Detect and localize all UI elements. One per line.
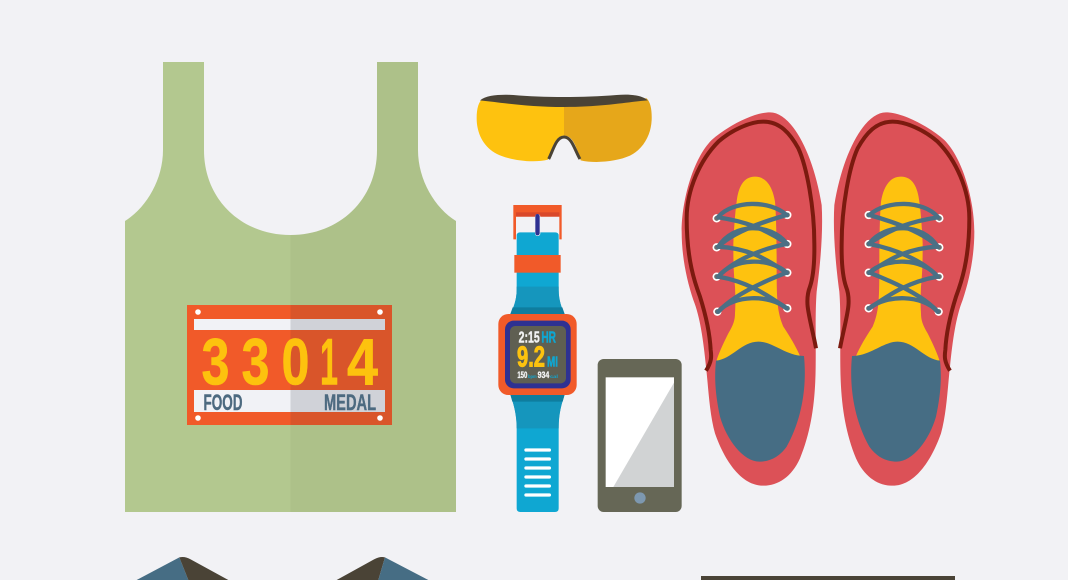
watch readouts: HR <box>541 329 556 346</box>
strap loop <box>514 255 561 273</box>
tank top body <box>125 62 456 512</box>
bib labels: FOOD <box>204 390 242 415</box>
right lens <box>564 98 652 162</box>
screen <box>606 377 674 487</box>
top band <box>480 95 648 107</box>
tongue <box>856 177 939 367</box>
laces <box>718 204 787 312</box>
bib number <box>202 324 378 398</box>
running shoes <box>682 112 974 486</box>
smart watch <box>498 205 577 512</box>
bib number: 0 <box>282 324 310 398</box>
right blue panel <box>378 557 428 580</box>
tank top with race bib <box>125 62 456 512</box>
bib number: 1 <box>320 324 338 398</box>
eyelets <box>713 212 791 315</box>
upper strap <box>510 232 565 315</box>
cropped shorts at bottom edge <box>137 557 428 580</box>
bib number: 3 <box>242 324 270 398</box>
home button <box>634 492 646 504</box>
shoe sole <box>834 112 974 486</box>
watch case <box>498 314 577 395</box>
shoe outline stitching <box>687 122 816 371</box>
watch readouts <box>517 329 558 380</box>
toe cap <box>851 342 941 462</box>
right shoe <box>834 112 974 486</box>
watch readouts: bpm <box>528 374 537 379</box>
watch readouts: 934 <box>538 370 550 380</box>
race bib <box>187 305 392 425</box>
shoe sole <box>682 112 822 486</box>
tongue <box>717 177 800 367</box>
smartphone <box>598 359 682 512</box>
lower strap <box>510 393 565 512</box>
watch readouts: MI <box>547 355 558 371</box>
left dark panel <box>179 557 228 580</box>
buckle pin <box>535 214 540 236</box>
eyelets <box>865 212 943 315</box>
bib labels: MEDAL <box>324 390 376 415</box>
strap holes <box>524 448 551 497</box>
laces <box>869 204 938 312</box>
left shoe <box>682 112 822 486</box>
buckle <box>513 205 562 239</box>
right dark panel <box>337 557 385 580</box>
left blue panel <box>137 557 188 580</box>
cropped dark bar at bottom edge <box>701 576 955 580</box>
sunglasses <box>477 95 652 162</box>
watch readouts: 150 <box>517 370 527 380</box>
watch readouts: cal <box>550 374 558 379</box>
bib number: 3 <box>202 324 230 398</box>
left lens <box>477 98 564 161</box>
watch readouts: 2:15 <box>519 329 540 346</box>
watch readouts: 9.2 <box>517 342 545 374</box>
shoe outline stitching <box>840 122 969 371</box>
bib number: 4 <box>347 324 378 398</box>
toe cap <box>715 342 805 462</box>
bib labels <box>204 390 376 415</box>
nose bridge <box>549 137 580 159</box>
